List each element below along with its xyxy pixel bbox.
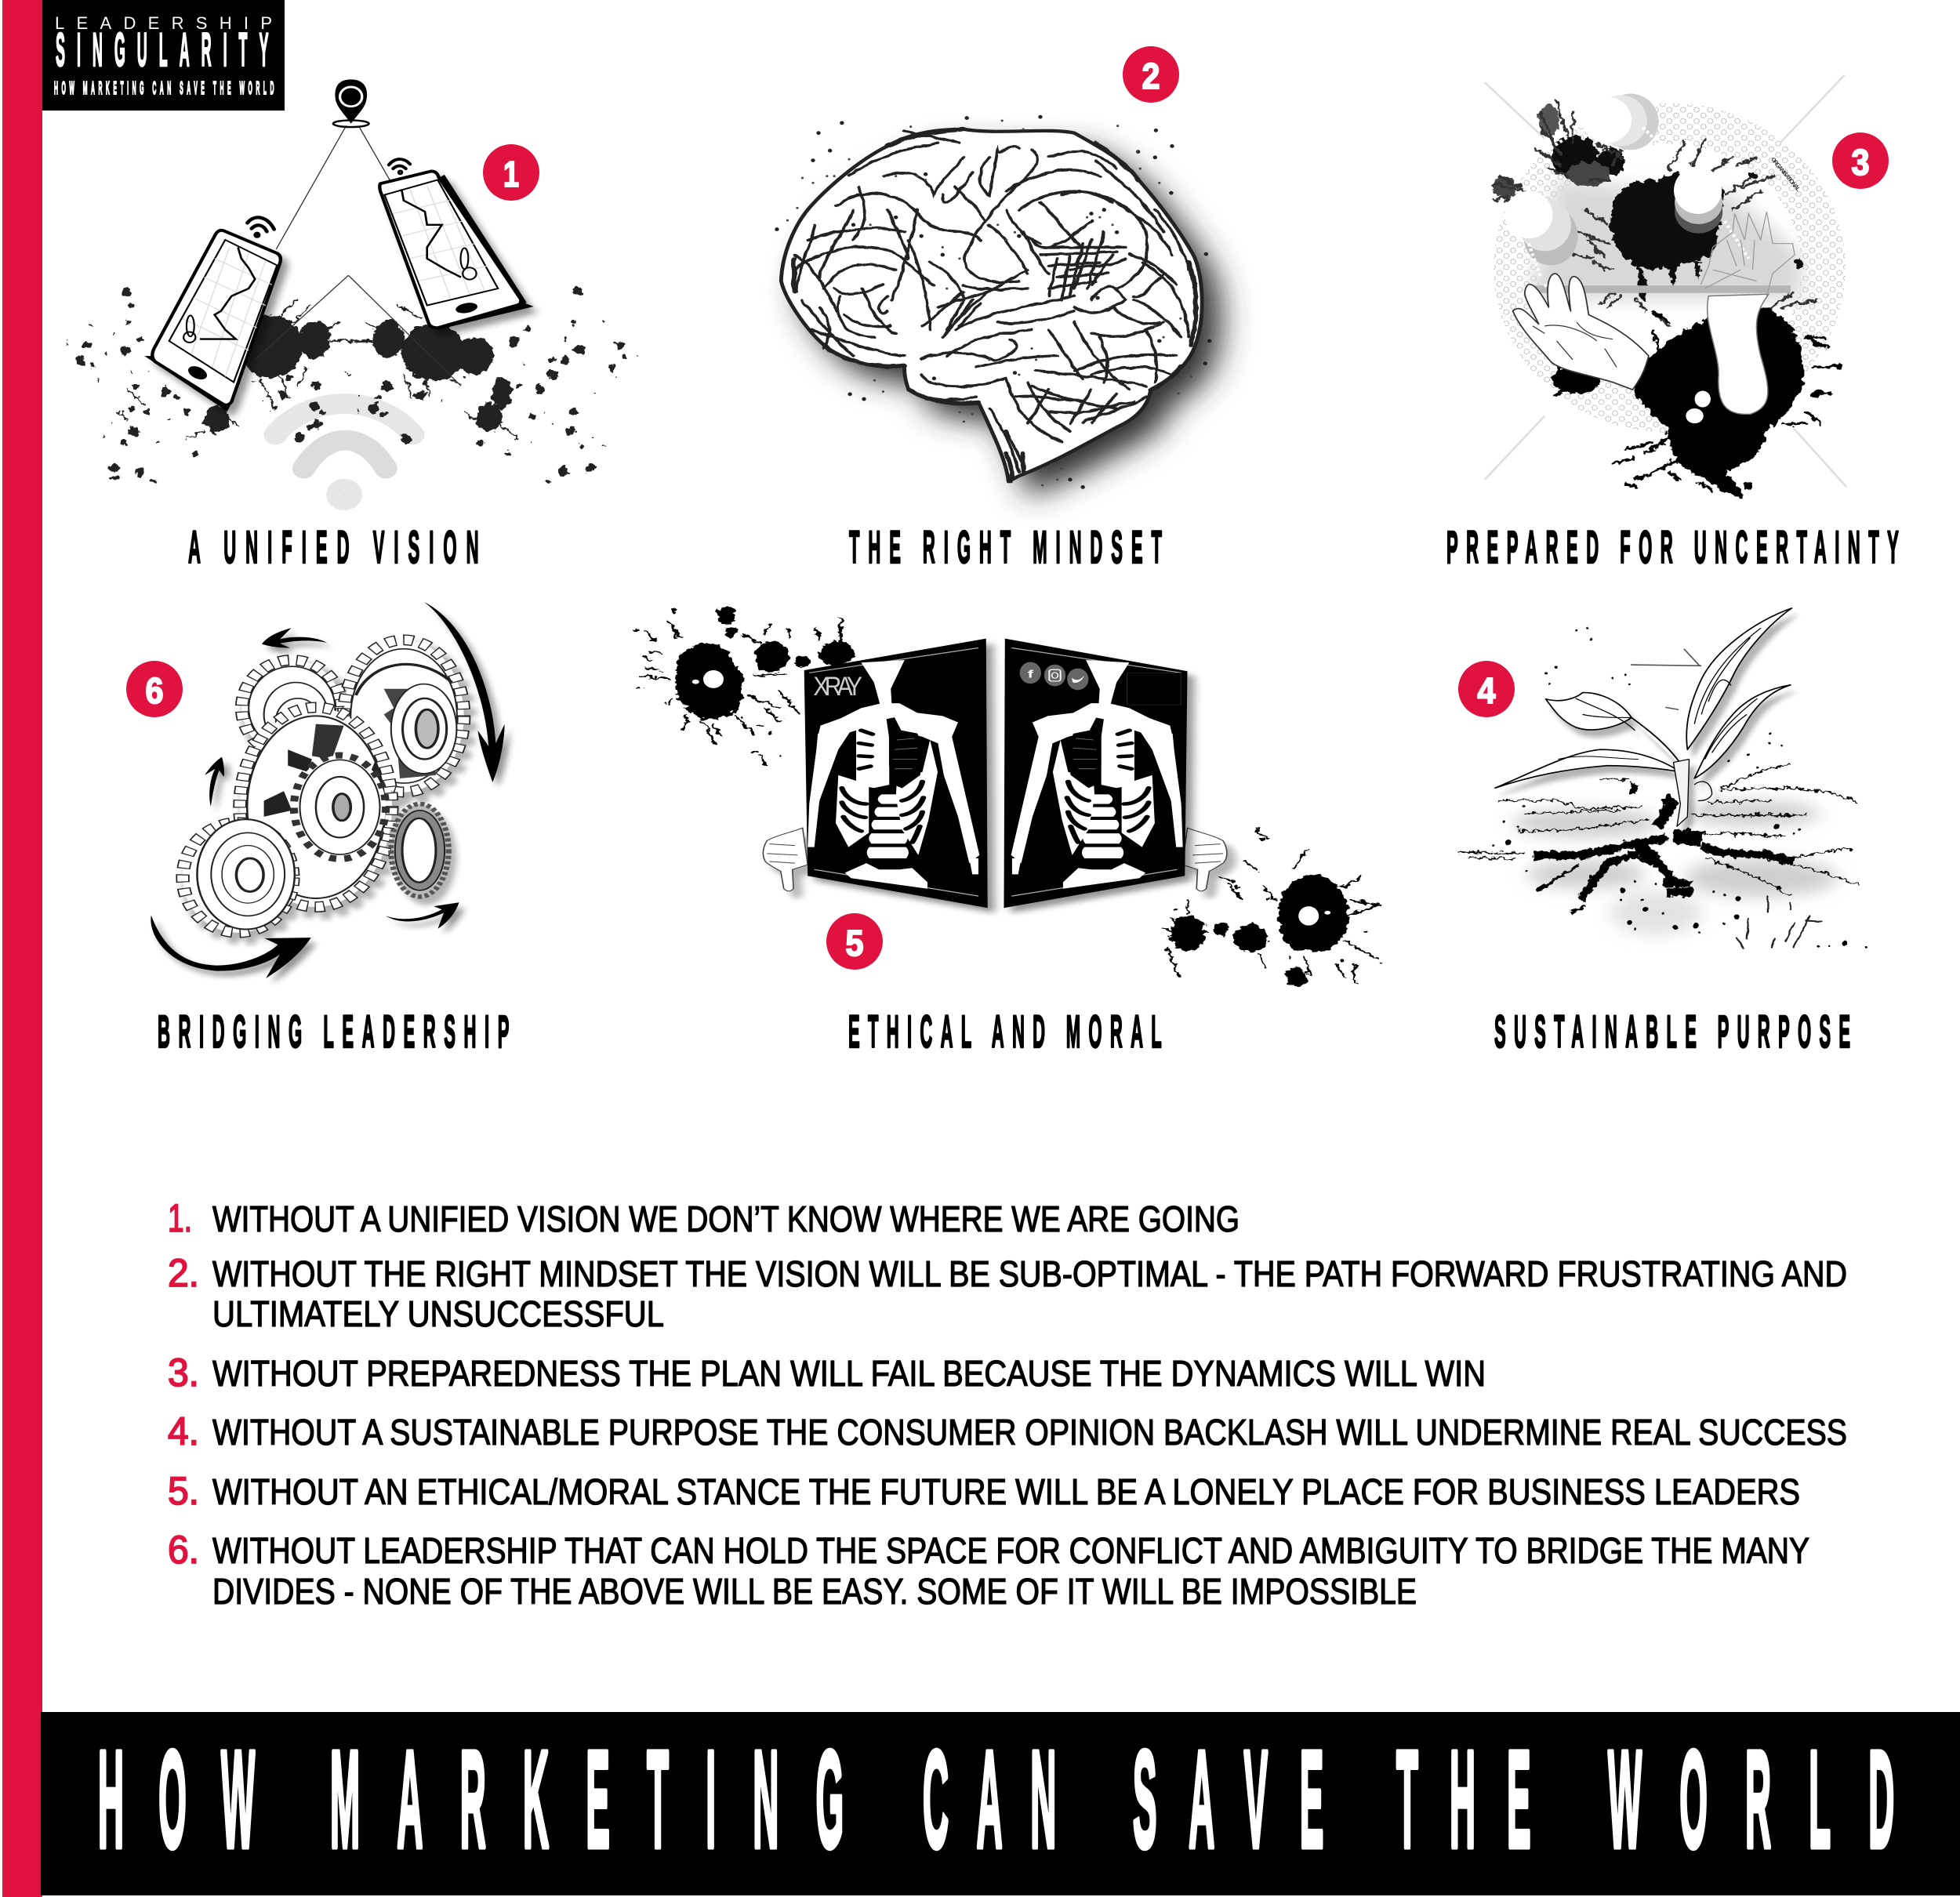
title: ethical and moral: ETHICAL AND MORAL	[848, 1007, 1162, 1057]
soil specks	[1494, 628, 1866, 948]
statement 3: 3.	[168, 1351, 199, 1395]
banner title: MARKETING	[330, 1724, 844, 1877]
badge 1: 1	[503, 154, 519, 194]
black screen block	[1127, 673, 1181, 705]
ground strokes	[1458, 764, 1860, 912]
badge 4	[1458, 661, 1515, 717]
gear: top left	[242, 660, 342, 756]
badge 5: 5	[845, 923, 864, 963]
wifi icon on left phone	[247, 217, 274, 237]
banner title: THE	[1396, 1724, 1531, 1877]
brain outline	[781, 129, 1202, 481]
open hand	[1513, 274, 1649, 390]
statement 2: 2.	[168, 1251, 199, 1295]
title: sustainable purpose: SUSTAINABLE PURPOSE	[1494, 1007, 1850, 1057]
illustration 3: prepared for uncertainty	[1485, 75, 1846, 499]
badge 4: 4	[1477, 670, 1496, 711]
illustration 4: plant	[1458, 608, 1866, 948]
wifi icon on right phone	[389, 159, 410, 173]
gear: lower left	[183, 819, 295, 933]
badge 6	[126, 661, 183, 717]
banner title	[98, 1724, 1894, 1877]
soft ground shadow	[1512, 801, 1838, 935]
bottom banner	[41, 1712, 1960, 1895]
illustration 1: unified vision, phones and ink blots	[68, 79, 637, 502]
logo block: HOW MARKETING CAN SAVE THE WORLD	[54, 78, 274, 98]
brain folds	[794, 129, 1196, 481]
statement 6	[168, 1528, 1809, 1612]
badge 3: 3	[1852, 142, 1869, 183]
logo block: LEADERSHIP	[55, 13, 272, 33]
statement 1: 1.	[168, 1196, 192, 1240]
shelf	[1529, 285, 1791, 293]
floating white discs	[1504, 94, 1748, 315]
white spot in blot	[692, 670, 724, 688]
badge 1	[483, 144, 539, 201]
badge 2	[1123, 46, 1179, 103]
arrow mark	[1631, 649, 1701, 709]
right skeleton	[1011, 660, 1183, 889]
soft shelf shadow	[1529, 180, 1802, 299]
ink blots	[68, 292, 637, 481]
statement 1: WITHOUT A UNIFIED VISION WE DON’T KNOW WHERE WE ARE GOING	[212, 1199, 1240, 1239]
brain shadow	[800, 146, 1221, 499]
left hand thumb down	[763, 828, 808, 891]
statement 2: ULTIMATELY UNSUCCESSFUL	[212, 1293, 664, 1334]
logo block: SINGULARITY	[56, 24, 269, 77]
left thumbs-up fist	[887, 717, 924, 788]
statement 6: DIVIDES - NONE OF THE ABOVE WILL BE EASY. SOME OF IT WILL BE IMPOSSIBLE	[212, 1571, 1417, 1612]
ring caption: ORGANISATIONAL	[1769, 156, 1802, 193]
white spot in lower blot	[1298, 906, 1330, 926]
banner title: SAVE	[1133, 1724, 1323, 1877]
badge 2: 2	[1142, 56, 1160, 96]
statement 2	[168, 1251, 1847, 1334]
location pin and connecting lines	[255, 79, 461, 386]
raised hand and arm	[1700, 212, 1795, 414]
lower ink blot	[1552, 308, 1842, 499]
white holes in blot	[1686, 391, 1711, 423]
icon: grey wifi signal	[275, 404, 413, 502]
left rib gaps	[842, 731, 924, 843]
statement 6: 6.	[168, 1528, 199, 1572]
right phone	[379, 171, 534, 330]
left skeleton	[808, 660, 979, 889]
statement 4: 4.	[168, 1409, 199, 1453]
ink blots lower right	[1162, 829, 1381, 986]
title: the right mindset: THE RIGHT MINDSET	[849, 522, 1162, 573]
social icons	[1020, 662, 1088, 690]
illustration 2: brain	[777, 117, 1221, 499]
statement 3: WITHOUT PREPAREDNESS THE PLAN WILL FAIL BECAUSE THE DYNAMICS WILL WIN	[212, 1353, 1486, 1394]
ink blots upper left	[636, 606, 853, 766]
crossing lines	[1485, 75, 1846, 487]
brain ink specks	[777, 117, 1210, 487]
banner title: CAN	[923, 1724, 1056, 1877]
badge 3	[1832, 132, 1889, 189]
title: bridging leadership: BRIDGING LEADERSHIP	[158, 1007, 509, 1057]
gears	[183, 640, 464, 933]
gear: centre large	[240, 707, 392, 907]
statement 5: 5.	[168, 1469, 199, 1513]
left phone	[144, 230, 281, 412]
red side bar	[2, 0, 42, 1897]
illustration 6: gears and arrows	[151, 602, 505, 978]
numbered statement list	[168, 1196, 1847, 1612]
title: a unified vision: A UNIFIED VISION	[188, 522, 479, 573]
direction arrows	[151, 602, 505, 978]
plant leaves	[1495, 608, 1791, 826]
left x-ray panel	[804, 639, 988, 908]
xray label: XRAY	[813, 671, 862, 701]
illustration 5: x-ray panels	[636, 606, 1381, 986]
banner title: WORLD	[1608, 1724, 1894, 1877]
gear: small ring	[391, 804, 448, 897]
right x-ray panel	[1004, 639, 1187, 908]
gear: top right	[344, 640, 464, 793]
upper ink blots	[1493, 101, 1817, 326]
badge 6: 6	[146, 670, 163, 711]
right hand thumb down	[1182, 828, 1227, 891]
logo block	[42, 0, 285, 111]
dotted ring	[1515, 124, 1824, 412]
social icons: f	[1028, 668, 1034, 680]
banner title: HOW	[98, 1724, 255, 1877]
badge 5	[826, 913, 883, 970]
title: prepared for uncertainty: PREPARED FOR UNCERTAINTY	[1446, 522, 1899, 573]
